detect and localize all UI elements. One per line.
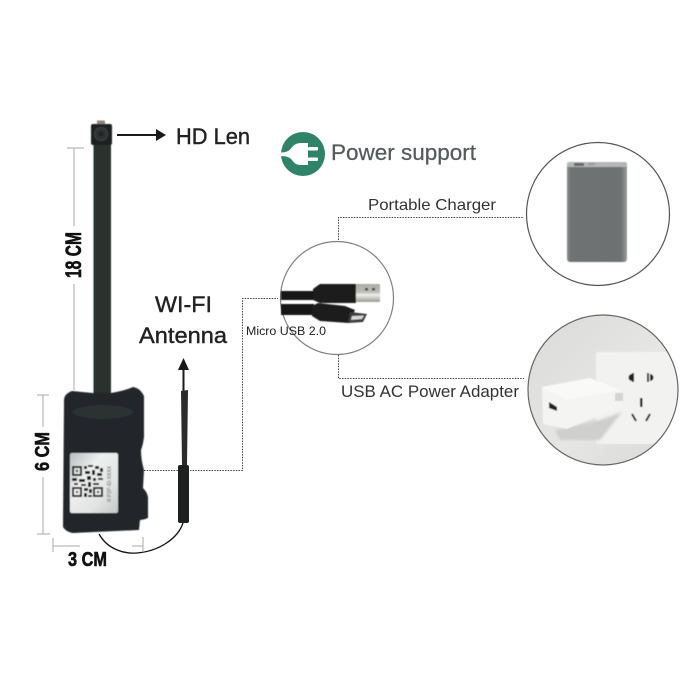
- wall socket: [596, 352, 686, 444]
- label: USB AC power adapter: USB AC Power Adapter: [341, 383, 520, 401]
- camera module board: [63, 387, 148, 533]
- dimension: 6 cm: [32, 395, 54, 534]
- icon: green plug: [281, 132, 325, 176]
- infographic: [34, 120, 679, 566]
- label: micro USB 2.0: Micro USB 2.0: [246, 326, 326, 338]
- icon: power bank: [567, 162, 627, 262]
- USB adapter: [542, 378, 623, 440]
- arrow: to HD lens: [117, 129, 166, 141]
- circle: USB AC adapter and socket: [528, 315, 686, 465]
- heading: HD Len: HD Len: [176, 124, 250, 149]
- QR code sticker: [70, 453, 118, 513]
- camera strap with lens: [91, 120, 112, 395]
- circle: micro USB cable: [280, 242, 394, 354]
- antenna with wire: [99, 390, 189, 553]
- dimension: 3 cm: 3 CM: [68, 549, 107, 571]
- label: portable charger: Portable Charger: [368, 197, 497, 214]
- dotted connectors: [144, 218, 524, 470]
- label: WI-FI Antenna: [139, 292, 228, 348]
- dimension: 3 cm: [53, 537, 143, 571]
- label: WI-FI Antenna: Antenna: [139, 323, 228, 348]
- dimension: 18 cm: 18 CM: [61, 232, 86, 278]
- QR code sticker: © P2P-ID-XXXX: [106, 465, 113, 502]
- arrow: to antenna: [178, 358, 189, 392]
- heading: power support: [281, 132, 477, 176]
- dimension: 18 cm: [61, 148, 86, 390]
- dimension: 6 cm: 6 CM: [32, 432, 54, 471]
- heading: power support: Power support: [331, 140, 477, 165]
- circle: portable charger: [526, 142, 670, 286]
- label: WI-FI Antenna: WI-FI: [155, 292, 212, 317]
